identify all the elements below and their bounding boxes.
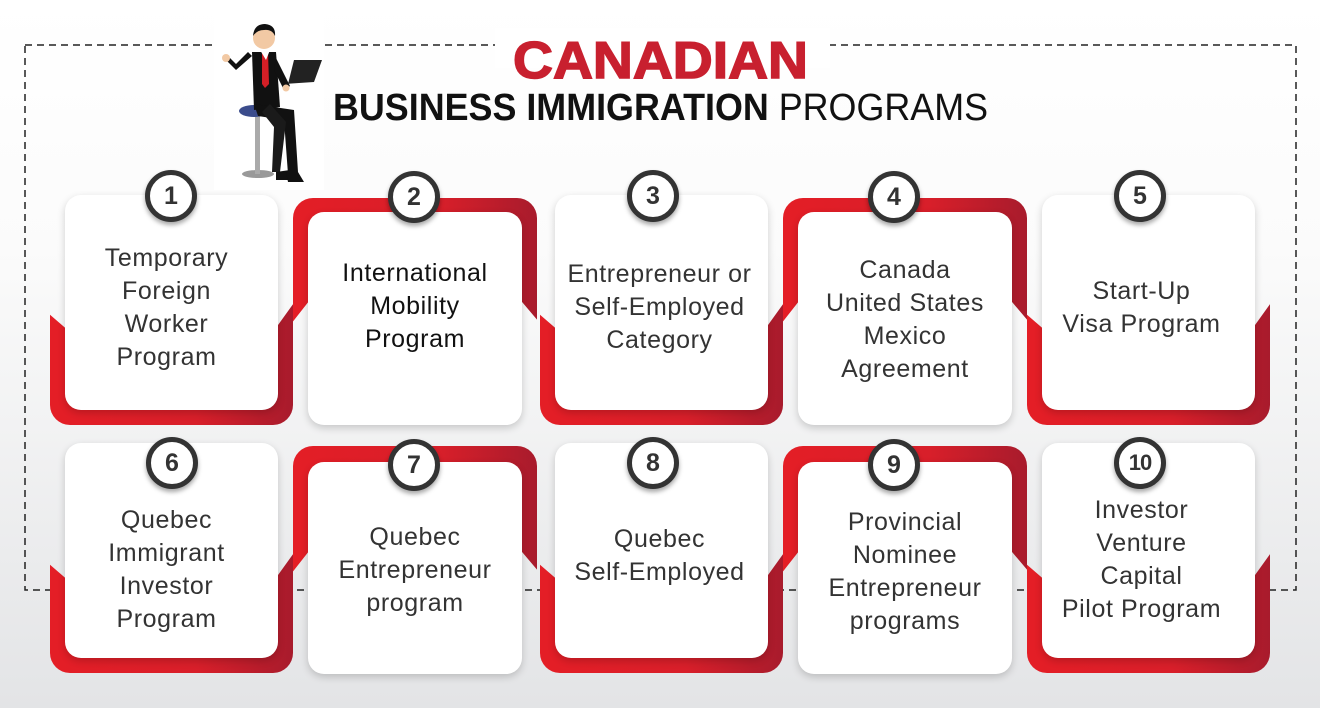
text 5: Visa Program	[1062, 310, 1221, 338]
person backdrop	[214, 12, 324, 190]
text 7	[338, 523, 492, 617]
number 6	[146, 437, 198, 489]
number 8	[627, 437, 679, 489]
text 1: Program	[116, 343, 217, 371]
text 9: Entrepreneur	[828, 574, 982, 602]
text 10: Venture	[1096, 529, 1187, 557]
number 10	[1114, 437, 1166, 489]
card 1	[65, 195, 278, 410]
text 1: Foreign	[122, 277, 211, 305]
text 4: United States	[826, 289, 984, 317]
text 3: Entrepreneur or	[567, 260, 752, 288]
text 2: International	[342, 259, 488, 287]
title backdrop	[495, 28, 830, 68]
title: CANADIAN	[513, 32, 808, 90]
card 6	[65, 443, 278, 658]
text 6: Quebec	[121, 506, 212, 534]
text 3: Self-Employed	[574, 293, 745, 321]
card 4	[798, 212, 1012, 425]
number 9	[868, 439, 920, 491]
number 6: 6	[165, 448, 179, 476]
text 9: programs	[850, 607, 960, 635]
card 3	[555, 195, 768, 410]
number 10: 10	[1129, 450, 1151, 475]
text 1: Worker	[125, 310, 208, 338]
number 1	[145, 170, 197, 222]
text 10: Investor	[1095, 496, 1188, 524]
text 10	[1062, 496, 1221, 623]
text 2	[342, 259, 488, 353]
number 7: 7	[407, 450, 421, 478]
text 4: Agreement	[841, 355, 969, 383]
text 8: Self-Employed	[574, 558, 745, 586]
card 5	[1042, 195, 1255, 410]
text 9	[828, 508, 982, 635]
text 6: Immigrant	[108, 539, 225, 567]
card 7	[308, 462, 522, 674]
text 7: program	[366, 589, 464, 617]
number 4	[868, 171, 920, 223]
text 9: Nominee	[853, 541, 957, 569]
text 7: Entrepreneur	[338, 556, 492, 584]
icon: businessman on stool	[222, 24, 322, 182]
text 7: Quebec	[369, 523, 461, 551]
number 2: 2	[407, 182, 421, 210]
number 7	[388, 439, 440, 491]
text 2: Program	[365, 325, 465, 353]
number 3: 3	[646, 182, 660, 210]
number 1: 1	[164, 182, 178, 210]
text 1: Temporary	[105, 244, 228, 272]
text 9: Provincial	[848, 508, 962, 536]
number 8: 8	[646, 448, 660, 476]
text 5: Start-Up	[1093, 277, 1190, 305]
text 1	[105, 244, 228, 371]
text 8	[574, 525, 745, 586]
number 5: 5	[1133, 182, 1147, 210]
number 3	[627, 170, 679, 222]
text 3: Category	[606, 326, 713, 354]
text 4: Canada	[859, 256, 951, 284]
text 4	[826, 256, 984, 383]
text 10: Pilot Program	[1062, 595, 1221, 623]
text 6: Investor	[120, 572, 213, 600]
number 5	[1114, 170, 1166, 222]
text 6	[108, 506, 225, 633]
card 9	[798, 462, 1012, 674]
card 8	[555, 443, 768, 658]
title	[333, 32, 988, 129]
card 10	[1042, 443, 1255, 658]
text 4: Mexico	[864, 322, 946, 350]
number 9: 9	[887, 450, 901, 478]
title: BUSINESS IMMIGRATION PROGRAMS	[333, 87, 988, 129]
text 8: Quebec	[614, 525, 705, 553]
text 2: Mobility	[370, 292, 460, 320]
text 3	[567, 260, 752, 354]
text 10: Capital	[1100, 562, 1183, 590]
number 2	[388, 171, 440, 223]
text 6: Program	[116, 605, 217, 633]
red ribbons	[50, 198, 1270, 673]
text 5	[1062, 277, 1221, 338]
number 4: 4	[887, 182, 901, 210]
card 2	[308, 212, 522, 425]
